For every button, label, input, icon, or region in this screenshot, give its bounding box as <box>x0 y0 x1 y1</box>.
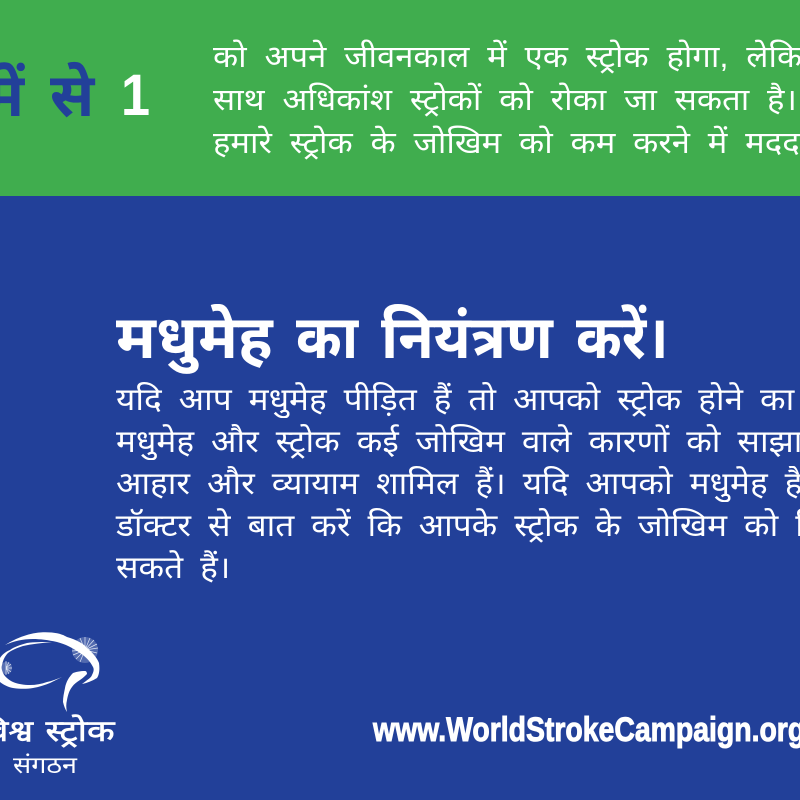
text block: diabetes body: आहार और व्यायाम शामिल हैं। यदि आपको मधुमेह है <box>116 466 800 501</box>
heading: control diabetes: मधुमेह <box>116 304 273 371</box>
icon: world stroke organization logo <box>0 632 100 712</box>
heading: control diabetes: का <box>296 304 358 371</box>
heading: one in statistic: से <box>50 62 94 129</box>
icon: burst top right <box>72 637 98 663</box>
icon: burst left <box>0 661 12 675</box>
icon: upper swoosh <box>5 632 99 684</box>
text block: diabetes body: सकते हैं। <box>116 550 230 585</box>
heading: control diabetes: नियंत्रण <box>381 304 553 371</box>
text block: header statement: हमारे स्ट्रोक के जोखिम को कम करने में मदद <box>213 126 800 160</box>
panel: green header band <box>0 0 800 196</box>
text: organisation subtitle: संगठन <box>13 752 77 778</box>
heading: control diabetes <box>116 304 668 374</box>
text: website url: www.WorldStrokeCampaign.org <box>373 711 800 749</box>
text block: diabetes body: मधुमेह और स्ट्रोक कई जोखिम वाले कारणों को साझा <box>116 424 800 459</box>
heading: one in statistic: 1 <box>121 63 150 128</box>
text block: diabetes body: यदि आप मधुमेह पीड़ित हैं तो आपको स्ट्रोक होने का <box>116 382 794 417</box>
heading: control diabetes: करें। <box>576 304 668 371</box>
icon: tail drop <box>63 671 87 712</box>
text block: header statement <box>213 40 800 160</box>
text block: diabetes body <box>116 382 800 585</box>
text block: header statement: साथ अधिकांश स्ट्रोकों को रोका जा सकता है। <box>213 83 797 117</box>
icon: lower swoosh <box>0 642 62 689</box>
heading: one in statistic <box>0 62 150 129</box>
